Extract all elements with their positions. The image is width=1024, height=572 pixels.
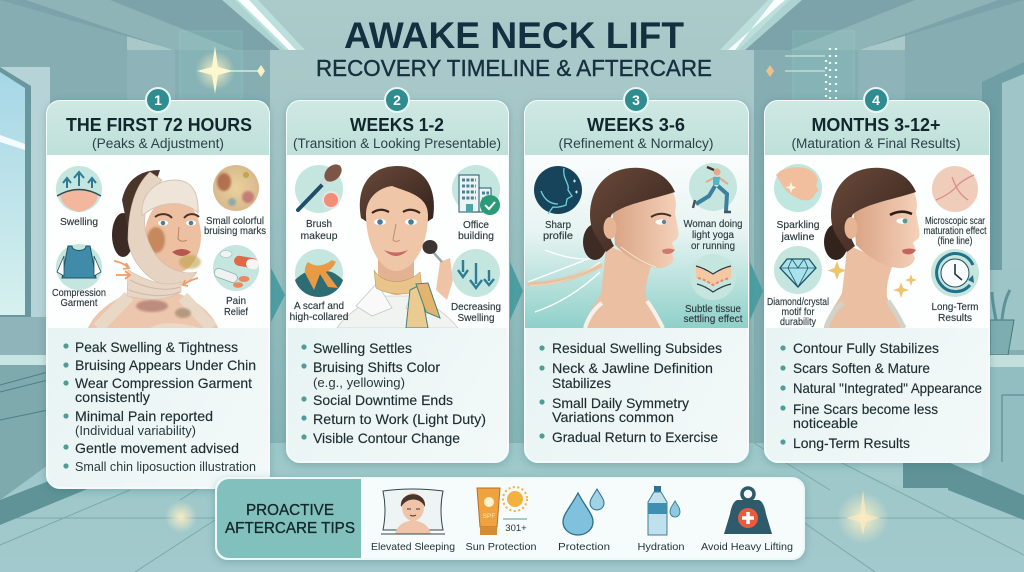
icon: brush makeup <box>295 161 345 213</box>
tips heading block <box>217 479 361 558</box>
panel: weeks 1-2 <box>287 88 508 462</box>
bullet list <box>63 339 256 474</box>
bullet list: (e.g., yellowing) <box>313 375 405 390</box>
label: or running <box>691 240 735 252</box>
icon: water drops <box>563 489 604 535</box>
label: maturation effect <box>924 225 987 237</box>
bullet list: Small chin liposuction illustration <box>75 459 256 474</box>
tips heading block: AFTERCARE TIPS <box>225 520 355 537</box>
forehead band <box>142 180 198 216</box>
label: Microscopic scar <box>925 215 985 227</box>
step badge 2 <box>385 88 409 112</box>
scarf <box>374 270 422 294</box>
bullet list: Residual Swelling Subsides <box>552 340 722 356</box>
hair <box>360 166 434 222</box>
label: Sparkling <box>776 219 820 231</box>
step badge 2: 2 <box>393 92 401 108</box>
icon: scarf and collar <box>295 249 343 297</box>
icon: clock long-term <box>931 249 979 297</box>
bullet list: Visible Contour Change <box>313 430 460 446</box>
label: light yoga <box>692 229 734 241</box>
icon: woman running <box>689 163 737 212</box>
icon: elevated sleeping <box>381 489 445 534</box>
label: Diamond/crystal <box>767 296 829 308</box>
label: Sharp <box>545 219 571 231</box>
label: settling effect <box>684 313 743 325</box>
title: AWAKE NECK LIFT <box>344 15 684 56</box>
tips heading block: PROACTIVE <box>246 502 334 519</box>
bullet list: Scars Soften & Mature <box>793 360 930 376</box>
label: bruising marks <box>204 225 266 237</box>
step badge 4 <box>864 88 888 112</box>
label: Swelling <box>60 216 98 228</box>
panel: proactive aftercare tips <box>216 478 804 559</box>
panel: months 3-12+ <box>765 88 989 462</box>
label: Relief <box>224 306 248 318</box>
icon: water bottle <box>648 486 680 535</box>
icon: office building <box>452 165 500 215</box>
left window <box>0 67 50 357</box>
label: Sun Protection <box>466 541 537 553</box>
right window <box>982 62 1024 270</box>
panel: weeks 3-6 <box>525 88 748 462</box>
step badge 1 <box>146 88 170 112</box>
label: Pain <box>226 295 246 307</box>
neck <box>378 255 414 295</box>
label: Avoid Heavy Lifting <box>701 541 793 553</box>
icon: sunscreen and sun: SPF <box>483 513 495 520</box>
face <box>146 204 201 272</box>
title <box>316 15 712 81</box>
label: Results <box>938 312 972 324</box>
panel: the first 72 hours <box>47 88 269 488</box>
sparkle accents <box>828 261 917 298</box>
icon: microscopic scar <box>932 166 978 212</box>
floor <box>0 443 1024 572</box>
label: (fine line) <box>938 235 972 247</box>
label: Subtle tissue <box>685 303 741 315</box>
icon: compression garment <box>56 244 102 290</box>
heading: MONTHS 3-12+ <box>812 115 940 135</box>
wrap bandage <box>128 172 197 286</box>
bullet list: Small Daily Symmetry <box>552 395 689 411</box>
bullet list: Neck & Jawline Definition <box>552 360 713 376</box>
step badge 3: 3 <box>632 92 640 108</box>
illustration: streaks of light <box>528 250 600 312</box>
ceiling lights <box>222 0 305 50</box>
bullet list: Social Downtime Ends <box>313 392 453 408</box>
right plant pot <box>990 320 1014 355</box>
label: building <box>458 230 494 242</box>
step badge 4: 4 <box>872 92 880 108</box>
right counter <box>982 355 1024 367</box>
icon: heavy weight with medical cross <box>724 488 772 534</box>
orange arrows <box>114 261 198 286</box>
bullet list: Fine Scars become less <box>793 401 938 417</box>
features <box>155 214 199 218</box>
left and right walls <box>0 0 270 443</box>
icon: decreasing swelling arrows <box>452 249 500 297</box>
icon: bruising marks <box>213 165 259 211</box>
shirt <box>337 296 458 328</box>
heading: THE FIRST 72 HOURS <box>66 115 252 135</box>
bullet list: Gentle movement advised <box>75 440 239 456</box>
bullet list: Natural "Integrated" Appearance <box>793 380 982 396</box>
icon: tissue settling <box>690 254 736 300</box>
bullet list: Return to Work (Light Duty) <box>313 411 486 427</box>
label: Small colorful <box>206 215 264 227</box>
bullet list: Gradual Return to Exercise <box>552 429 718 445</box>
label: Hydration <box>638 541 685 553</box>
ceiling <box>0 0 285 50</box>
left counter <box>0 355 48 365</box>
subheading: (Refinement & Normalcy) <box>558 136 714 151</box>
icon: sunscreen and sun: 301+ <box>505 523 527 534</box>
label: jawline <box>780 231 815 243</box>
bullet list: Wear Compression Garment <box>75 375 252 391</box>
label: profile <box>543 230 573 242</box>
label: high-collared <box>290 311 349 323</box>
title: RECOVERY TIMELINE & AFTERCARE <box>316 55 712 81</box>
icon: sunscreen and sun <box>477 487 527 535</box>
icon: sharp profile <box>534 166 582 214</box>
bullet list: Bruising Appears Under Chin <box>75 357 256 373</box>
label: Office <box>463 219 489 231</box>
label: A scarf and <box>294 300 344 312</box>
icon: diamond <box>774 246 822 294</box>
bullet list <box>539 340 722 445</box>
bullet list: Stabilizes <box>552 375 611 391</box>
step badge 1: 1 <box>154 92 162 108</box>
label: Compression <box>52 287 106 299</box>
hair and bun <box>112 213 130 257</box>
subheading: (Maturation & Final Results) <box>792 136 960 151</box>
label: durability <box>780 316 817 328</box>
hand and brush <box>436 258 453 300</box>
label: Garment <box>60 297 98 309</box>
icon: sparkling jawline <box>774 164 822 212</box>
label: Elevated Sleeping <box>371 541 455 553</box>
heading: WEEKS 1-2 <box>350 115 444 135</box>
arrow: card 3 to 4 <box>750 262 763 320</box>
arrow: card 2 to 3 <box>510 262 523 320</box>
floor glows <box>837 492 889 544</box>
bullet list: Minimal Pain reported <box>75 408 213 424</box>
step badge 3 <box>624 88 648 112</box>
bullet list: Swelling Settles <box>313 340 412 356</box>
bullet list: Contour Fully Stabilizes <box>793 340 939 356</box>
icon: swelling <box>56 166 102 212</box>
label: Woman doing <box>684 218 743 230</box>
label: Brush <box>306 218 332 230</box>
bullet list: (Individual variability) <box>75 423 196 438</box>
bullet list: Peak Swelling & Tightness <box>75 339 238 355</box>
illustration: woman in profile, final result <box>824 168 920 328</box>
bullet list: Bruising Shifts Color <box>313 359 440 375</box>
bullet list <box>301 340 486 446</box>
bullet list: noticeable <box>793 415 858 431</box>
label: Protection <box>558 541 610 553</box>
arrow: card 1 to 2 <box>271 268 285 322</box>
illustration: woman in profile <box>583 168 679 328</box>
face <box>366 186 428 271</box>
glowing panels <box>180 31 242 111</box>
subheading: (Peaks & Adjustment) <box>92 136 224 151</box>
bullet list <box>780 340 982 451</box>
icon: pain relief pills <box>213 245 260 291</box>
label: Swelling <box>458 312 495 324</box>
bullet list: Long-Term Results <box>793 435 910 451</box>
label: motif for <box>782 306 815 318</box>
label: Long-Term <box>932 301 979 313</box>
bullet list: Variations common <box>552 409 674 425</box>
label: makeup <box>300 230 338 242</box>
illustration: bandaged face with bruises <box>88 170 218 328</box>
illustration: woman with scarf <box>337 166 458 328</box>
bullet list: consistently <box>75 389 150 405</box>
heading: WEEKS 3-6 <box>587 115 685 135</box>
label: Decreasing <box>451 301 501 313</box>
subheading: (Transition & Looking Presentable) <box>293 136 501 151</box>
